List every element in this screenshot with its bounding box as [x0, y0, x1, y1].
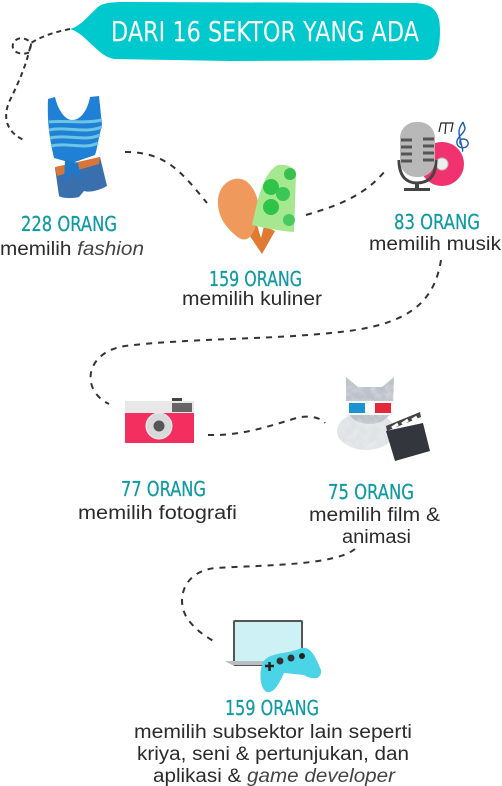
dashed route: film to others	[182, 549, 355, 643]
label: music	[369, 210, 502, 255]
label: film and animation: animasi	[342, 527, 411, 548]
label: film and animation	[309, 480, 440, 548]
dashed route: photography to film	[208, 417, 325, 435]
dashed route: music to photography	[91, 260, 441, 404]
label: photography	[78, 477, 237, 524]
icon: cat with 3D glasses and clapperboard	[337, 377, 430, 461]
label: culinary: memilih kuliner	[182, 289, 323, 310]
label: fashion: memilih fashion	[0, 239, 144, 260]
icon: treble clef	[457, 122, 468, 151]
label: photography: memilih fotografi	[78, 503, 237, 524]
title: DARI 16 SEKTOR YANG ADA	[111, 15, 419, 48]
label: culinary	[182, 267, 323, 310]
dashed route: banner to fashion	[6, 29, 70, 141]
icon: laptop and game controller	[225, 620, 321, 692]
dashed route: fashion to culinary	[125, 152, 207, 203]
icon: fashion outfit	[48, 96, 107, 198]
label: music: 83 ORANG	[394, 210, 480, 234]
label: music: memilih musik	[369, 234, 502, 255]
label: other subsectors	[134, 696, 412, 786]
label: fashion: 228 ORANG	[21, 212, 117, 236]
label: culinary: 159 ORANG	[209, 267, 302, 291]
icon: camera	[125, 398, 194, 443]
icon: music notes	[439, 123, 453, 134]
label: fashion	[0, 212, 144, 260]
label: other subsectors: 159 ORANG	[225, 696, 319, 720]
label: other subsectors: memilih subsektor lain seperti	[134, 722, 412, 743]
icon: microphone and disc	[399, 122, 468, 191]
label: film and animation: 75 ORANG	[328, 480, 414, 504]
banner: title bubble	[70, 2, 440, 61]
label: film and animation: memilih film &	[309, 505, 440, 526]
label: other subsectors: kriya, seni & pertunjukan, dan	[137, 744, 409, 765]
dashed route: culinary to music	[306, 171, 385, 215]
icon: popsicles	[218, 165, 296, 254]
label: photography: 77 ORANG	[121, 477, 206, 501]
